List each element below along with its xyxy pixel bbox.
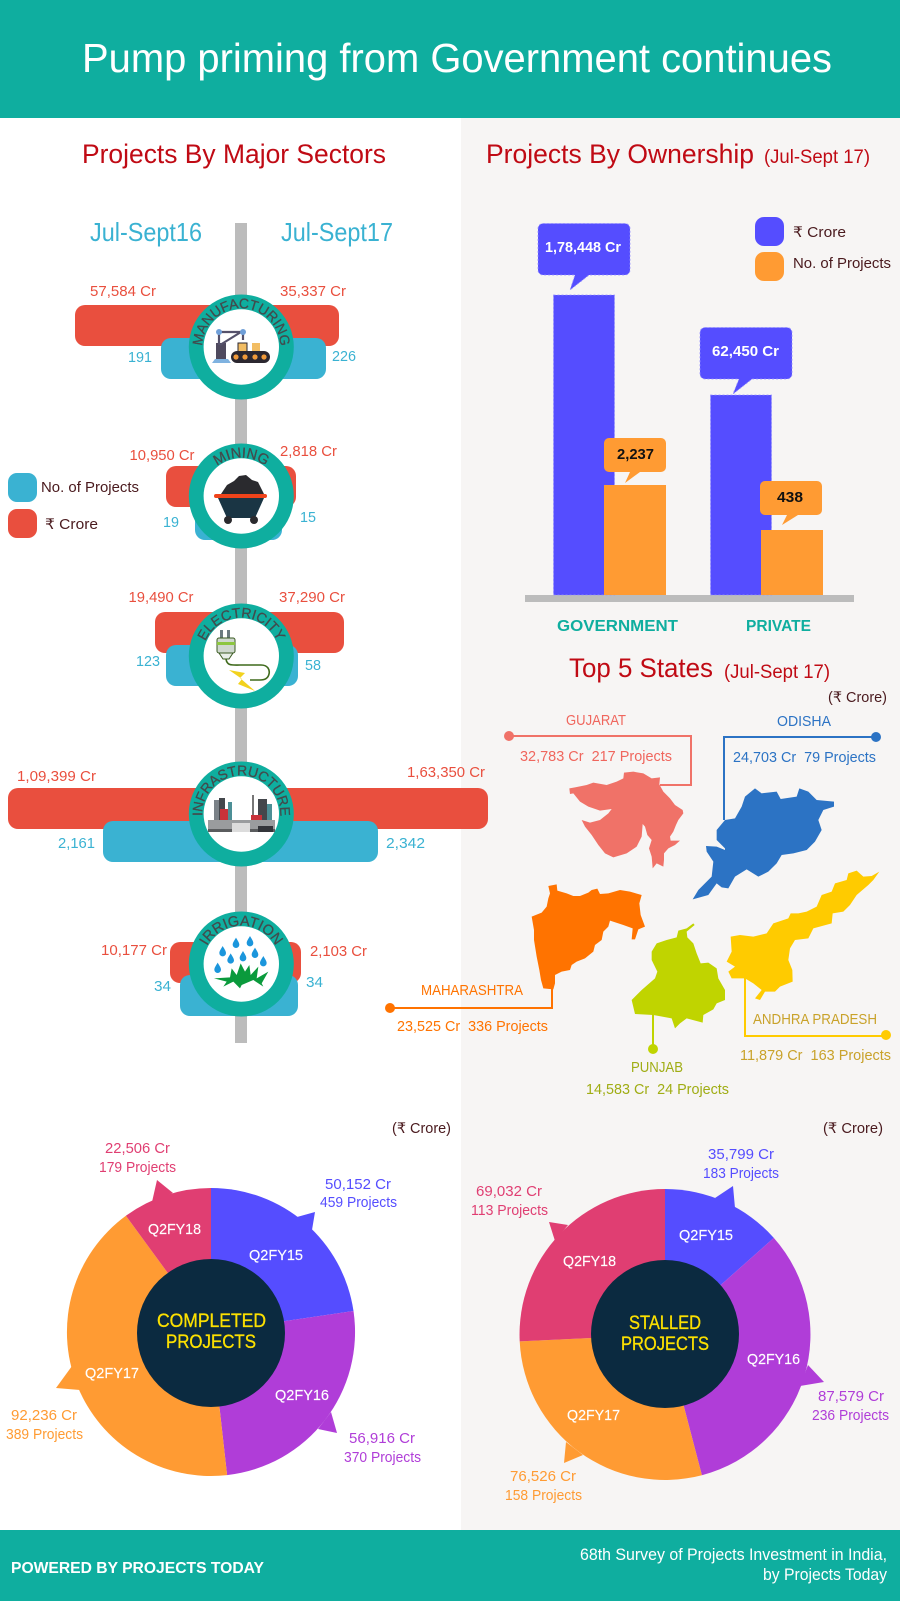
heading: projects by ownership: (Jul-Sept 17): [764, 146, 870, 168]
sector: infrastructure: 1,09,399 Cr: [17, 769, 96, 785]
slice: Q2FY17: 389 Projects: [6, 1427, 83, 1443]
sector: mining: 15: [300, 510, 316, 526]
slice: Q2FY16: Q2FY16: [275, 1387, 329, 1404]
sector: irrigation: 2,103 Cr: [310, 944, 367, 960]
heading: top 5 states: (Jul-Sept 17): [724, 661, 830, 683]
state: gujarat: [504, 712, 691, 868]
slice: Q2FY15: 459 Projects: [320, 1195, 397, 1211]
sector: irrigation: IRRIGATION: [199, 916, 284, 945]
donut centre: stalled: [591, 1260, 739, 1408]
legend: sectors: [8, 473, 139, 538]
bar: private projects: [761, 530, 823, 595]
slice: Q2FY17: 158 Projects: [505, 1488, 582, 1504]
sector: electricity: 58: [305, 658, 321, 674]
sector: mining: [130, 444, 337, 548]
slice: Q2FY15: [665, 1147, 779, 1334]
slice: Q2FY16: [665, 1238, 889, 1475]
slice: Q2FY17: 76,526 Cr: [510, 1469, 576, 1485]
icon: coal cart: [214, 475, 267, 524]
sector: manufacturing: [75, 284, 356, 400]
state: odisha: 24,703 Cr 79 Projects: [733, 750, 876, 766]
slice: Q2FY15: 50,152 Cr: [325, 1177, 391, 1193]
donut centre: completed: COMPLETED: [157, 1311, 266, 1332]
donut centre: completed: [137, 1259, 285, 1407]
sector: infrastructure: 1,63,350 Cr: [407, 765, 485, 781]
slice: Q2FY16: Q2FY16: [747, 1351, 800, 1368]
state: andhra pradesh: [727, 871, 891, 1064]
slice: Q2FY16: 56,916 Cr: [349, 1431, 415, 1447]
slice: Q2FY16: [211, 1311, 421, 1475]
legend: sectors: No. of Projects: [41, 480, 139, 496]
slice: Q2FY16: 87,579 Cr: [818, 1389, 884, 1405]
footer: [0, 1530, 900, 1601]
callout: 438: [760, 481, 822, 525]
heading: projects by major sectors: Projects By Major Sectors: [82, 139, 386, 169]
sector: irrigation: 34: [154, 979, 171, 995]
slice: Q2FY17: Q2FY17: [567, 1407, 620, 1424]
sector: infrastructure: 2,161: [58, 836, 95, 852]
bar: government crore: [554, 295, 614, 595]
slice: Q2FY16: 370 Projects: [344, 1450, 421, 1466]
sector: manufacturing: 57,584 Cr: [90, 284, 156, 300]
state: maharashtra: 23,525 Cr 336 Projects: [397, 1019, 548, 1035]
callout: 62,450 Cr: [700, 328, 792, 394]
state: maharashtra: [385, 884, 645, 1035]
unit note: stalled: (₹ Crore): [823, 1121, 883, 1137]
slice: Q2FY18: Q2FY18: [563, 1253, 616, 1270]
sector: mining: MINING: [212, 447, 269, 466]
header banner: [0, 0, 900, 118]
icon: rain over grass: [214, 936, 268, 988]
callout: 62,450 Cr: 62,450 Cr: [712, 343, 779, 360]
state: odisha: [693, 713, 881, 899]
slice: Q2FY15: [211, 1177, 397, 1332]
footer: source: by Projects Today: [763, 1566, 888, 1584]
heading: projects by ownership: [486, 139, 870, 169]
slice: Q2FY15: 35,799 Cr: [708, 1147, 774, 1163]
state: punjab: 14,583 Cr 24 Projects: [586, 1082, 729, 1098]
state: odisha: ODISHA: [777, 713, 831, 730]
slice: Q2FY17: [6, 1216, 227, 1476]
sector: irrigation: 10,177 Cr: [101, 943, 167, 959]
donut centre: completed: PROJECTS: [166, 1332, 256, 1353]
sector: mining: 2,818 Cr: [280, 444, 337, 460]
slice: Q2FY18: 69,032 Cr: [476, 1184, 542, 1200]
title: Pump priming from Government continues: [82, 35, 832, 81]
bar chart: ownership: [525, 224, 854, 635]
slice: Q2FY18: Q2FY18: [148, 1221, 201, 1238]
sector: manufacturing: 35,337 Cr: [280, 284, 346, 300]
sector: manufacturing: 226: [332, 349, 356, 365]
slice: Q2FY17: [505, 1334, 702, 1504]
donut centre: stalled: PROJECTS: [621, 1334, 709, 1355]
sector: electricity: ELECTRICITY: [197, 608, 286, 640]
axis label: private: PRIVATE: [746, 618, 811, 635]
callout: 1,78,448 Cr: 1,78,448 Cr: [545, 239, 621, 256]
footer: powered by: POWERED BY PROJECTS TODAY: [11, 1560, 264, 1577]
sector: infrastructure: [8, 762, 488, 866]
sector: irrigation: [101, 912, 367, 1016]
slice: Q2FY18: [471, 1184, 665, 1341]
sector: mining: 19: [163, 515, 179, 531]
column heading: Jul-Sept17: Jul-Sept17: [281, 217, 393, 247]
footer: source: [580, 1546, 888, 1584]
slice: Q2FY18: 22,506 Cr: [105, 1141, 170, 1157]
callout: 1,78,448 Cr: [538, 224, 630, 290]
state: andhra pradesh: 11,879 Cr 163 Projects: [740, 1048, 891, 1064]
spine: [235, 223, 247, 1043]
icon: robot arm on conveyor: [212, 329, 270, 363]
slice: Q2FY17: Q2FY17: [85, 1365, 139, 1382]
state: gujarat: 32,783 Cr 217 Projects: [520, 749, 672, 765]
sector: irrigation: 34: [306, 975, 323, 991]
sector: manufacturing: MANUFACTURING: [192, 298, 290, 346]
sector: manufacturing: 191: [128, 350, 152, 366]
icon: city skyline: [208, 795, 275, 832]
footer: source: 68th Survey of Projects Investment in India,: [580, 1546, 887, 1564]
donut chart: completed projects: [6, 1141, 421, 1476]
slice: Q2FY18: 113 Projects: [471, 1203, 548, 1219]
sector: infrastructure: INFRASTRUCTURE: [192, 765, 290, 816]
sector: electricity: 123: [136, 654, 160, 670]
slice: Q2FY18: [99, 1141, 211, 1332]
state: andhra pradesh: ANDHRA PRADESH: [753, 1011, 877, 1028]
column heading: Jul-Sept16: Jul-Sept16: [90, 217, 202, 247]
state: gujarat: GUJARAT: [566, 712, 626, 729]
bar: private crore: [710, 395, 772, 595]
slice: Q2FY18: 179 Projects: [99, 1160, 176, 1176]
unit note: completed: (₹ Crore): [392, 1121, 451, 1137]
callout: 438: 438: [777, 489, 803, 506]
sector: electricity: 19,490 Cr: [128, 590, 194, 606]
legend: ownership: No. of Projects: [793, 256, 891, 272]
slice: Q2FY15: Q2FY15: [679, 1227, 733, 1244]
slice: Q2FY16: 236 Projects: [812, 1408, 889, 1424]
sector: mining: 10,950 Cr: [130, 448, 195, 464]
state: maharashtra: MAHARASHTRA: [421, 982, 523, 999]
sector: infrastructure: 2,342: [386, 836, 425, 852]
heading: projects by ownership: Projects By Ownership: [486, 139, 754, 169]
legend: ownership: ₹ Crore: [793, 225, 846, 241]
slice: Q2FY17: 92,236 Cr: [11, 1408, 77, 1424]
heading: top 5 states: [569, 653, 830, 683]
legend: ownership: [755, 217, 891, 281]
callout: 2,237: 2,237: [617, 446, 654, 463]
axis label: government: GOVERNMENT: [557, 618, 678, 635]
slice: Q2FY15: Q2FY15: [249, 1247, 303, 1264]
sector: electricity: [128, 590, 345, 708]
bar: government projects: [604, 485, 666, 595]
donut centre: stalled: STALLED: [629, 1313, 701, 1334]
state: punjab: [586, 923, 729, 1098]
slice: Q2FY15: 183 Projects: [703, 1166, 779, 1182]
unit note: states: (₹ Crore): [828, 690, 887, 706]
state: punjab: PUNJAB: [631, 1059, 683, 1076]
icon: plug and lightning bolt: [217, 630, 269, 691]
callout: 2,237: [604, 438, 666, 483]
heading: top 5 states: Top 5 States: [569, 653, 713, 683]
donut chart: stalled projects: [471, 1147, 889, 1504]
sector: electricity: 37,290 Cr: [279, 590, 345, 606]
legend: sectors: ₹ Crore: [45, 517, 98, 533]
